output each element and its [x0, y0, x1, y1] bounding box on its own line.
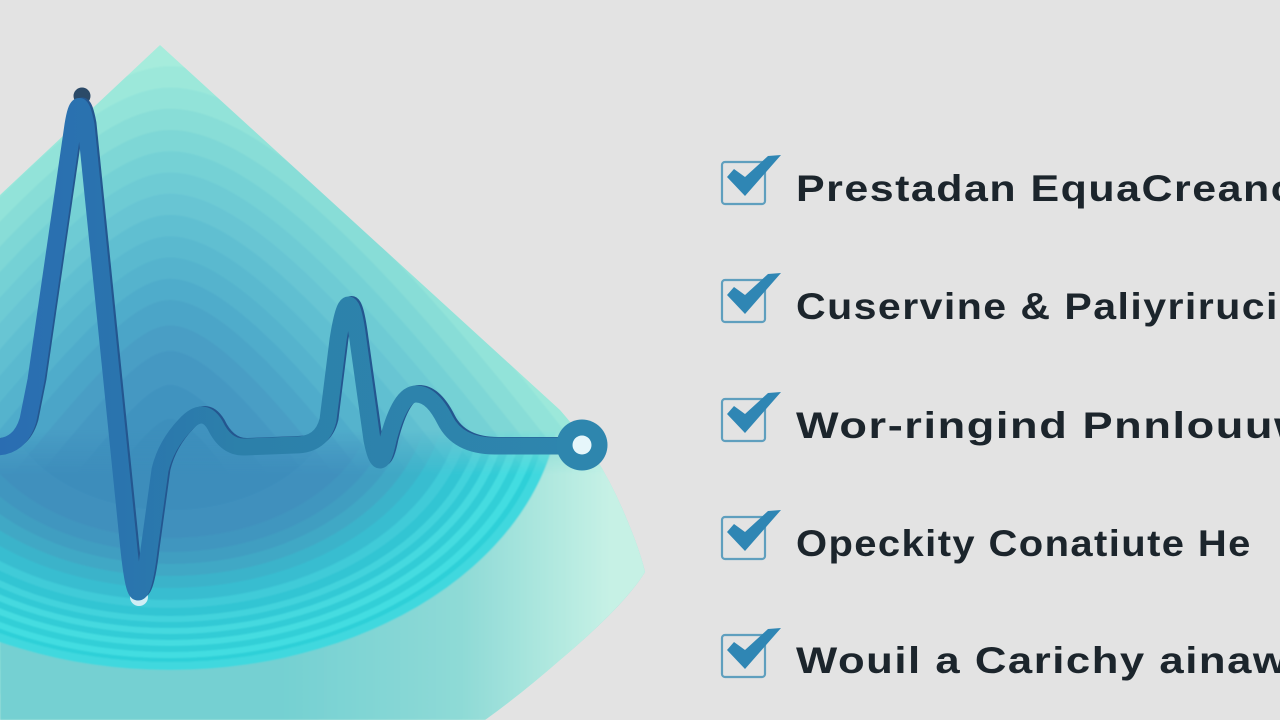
checklist item 4 — [720, 510, 781, 560]
checkbox icon — [720, 628, 781, 678]
checkbox icon — [720, 273, 781, 324]
checklist item 2 — [720, 273, 781, 324]
checklist item 3 — [720, 392, 781, 442]
checklist item 5 — [720, 628, 781, 678]
checkbox icon — [720, 510, 781, 560]
heartbeat line — [0, 88, 608, 606]
checkbox icon — [720, 392, 781, 442]
checklist text 4: Opeckity Conatiute He — [796, 523, 1252, 564]
teal layered fan — [0, 45, 645, 720]
illustration: heartbeat over layered teal fan — [0, 45, 645, 720]
checkbox icon — [720, 155, 781, 206]
checklist item 1 — [720, 155, 781, 206]
